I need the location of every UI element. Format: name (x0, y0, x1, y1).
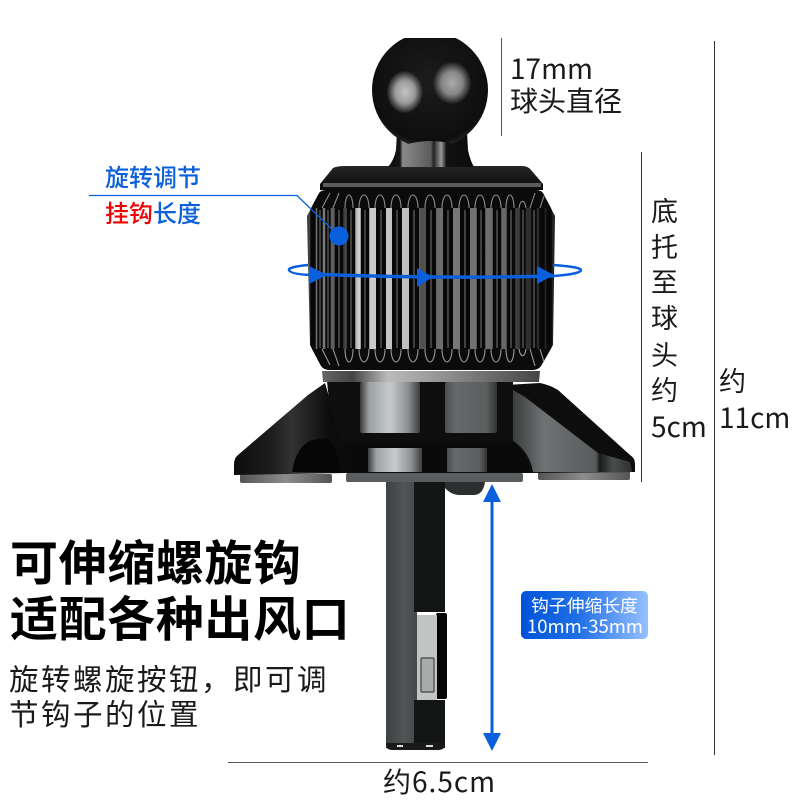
left wing screw recess (292, 438, 340, 472)
knob top band (311, 190, 551, 208)
label: ball diameter: 球头直径 (510, 80, 622, 120)
description text: 旋转螺旋按钮，即可调 (9, 657, 329, 699)
knurled knob (307, 190, 555, 370)
knob bottom band (312, 349, 551, 370)
knurl ribs medium (334, 208, 516, 349)
label: total height: 11cm (719, 397, 790, 437)
rotation line (310, 274, 553, 277)
knob cap (320, 166, 543, 190)
cylinder highlight left (360, 382, 420, 433)
label: base to ball height (651, 190, 707, 446)
extension length badge: 钩子伸缩长度 (531, 592, 638, 618)
bottom tooth outlines (322, 349, 544, 366)
ball diameter guide line (500, 38, 502, 136)
metal clip window (421, 658, 434, 692)
label: base to ball height: 头 (651, 334, 678, 373)
rotation ring left (289, 265, 310, 275)
label: total height: 约 (719, 360, 746, 399)
total height guide line (714, 41, 716, 755)
label: base to ball height: 约 (651, 369, 678, 408)
collar highlight left (368, 448, 422, 472)
extension length badge: 10mm-35mm (527, 613, 643, 639)
hook stem right face top (414, 482, 445, 612)
rotation arrow (289, 265, 581, 287)
callout dot (330, 226, 348, 246)
rib centre lines (320, 210, 534, 348)
stem catch (445, 482, 485, 495)
hook extension double arrow (483, 484, 501, 751)
label: ball diameter (510, 48, 622, 120)
knurl ribs wide (381, 196, 465, 362)
callout: rotate to adjust (89, 158, 348, 246)
label: total height (719, 360, 790, 437)
label: base to ball height: 托 (651, 226, 678, 265)
top tooth outlines (322, 193, 544, 208)
ball highlight left (387, 71, 423, 113)
description text: 节钩子的位置 (9, 692, 201, 734)
stem notch side (436, 613, 447, 699)
callout text: rotate adjust: 旋转调节 (105, 158, 201, 193)
label: width: 约6.5cm (383, 761, 496, 800)
width guide line (228, 762, 648, 764)
rotation ring right (553, 265, 581, 276)
stem foot slots (397, 745, 433, 747)
heading: 适配各种出风口 (10, 580, 350, 650)
rotation arrowheads (309, 266, 554, 287)
heading: 可伸缩螺旋钩 (10, 524, 302, 594)
extension length badge (521, 591, 648, 639)
callout text: hook length: 挂钩长度 (105, 194, 201, 229)
right wing grey face (512, 390, 632, 472)
ball neck (388, 132, 474, 167)
label: base to ball height: 球 (651, 297, 678, 336)
left wing of base (234, 383, 345, 475)
base cylinder (327, 381, 513, 445)
description text (9, 657, 329, 734)
cylinder highlight right (445, 382, 497, 433)
ball head (372, 32, 488, 148)
hook stem right face bottom (414, 700, 445, 748)
label: base to ball height: 底 (651, 190, 678, 229)
base-to-ball guide line (640, 152, 642, 482)
foot pads (240, 470, 630, 483)
heading (10, 524, 350, 650)
lower base collar (345, 443, 530, 473)
stem foot (386, 743, 445, 750)
label: base to ball height: 5cm (651, 406, 707, 446)
label: base to ball height: 至 (651, 261, 678, 300)
collar ring (322, 371, 540, 382)
cap highlight line (323, 183, 541, 187)
metal clip (417, 615, 437, 700)
callout leader line (89, 196, 339, 236)
collar highlight right (447, 448, 487, 472)
knurl ribs narrow (313, 196, 549, 362)
hook stem left face (386, 482, 417, 748)
label: ball diameter: 17mm (510, 48, 593, 88)
ball highlight right (433, 62, 471, 104)
product: vent mount (234, 32, 635, 750)
right wing outline (505, 383, 635, 473)
bottom plate (346, 473, 523, 482)
knob base tone (307, 190, 555, 370)
